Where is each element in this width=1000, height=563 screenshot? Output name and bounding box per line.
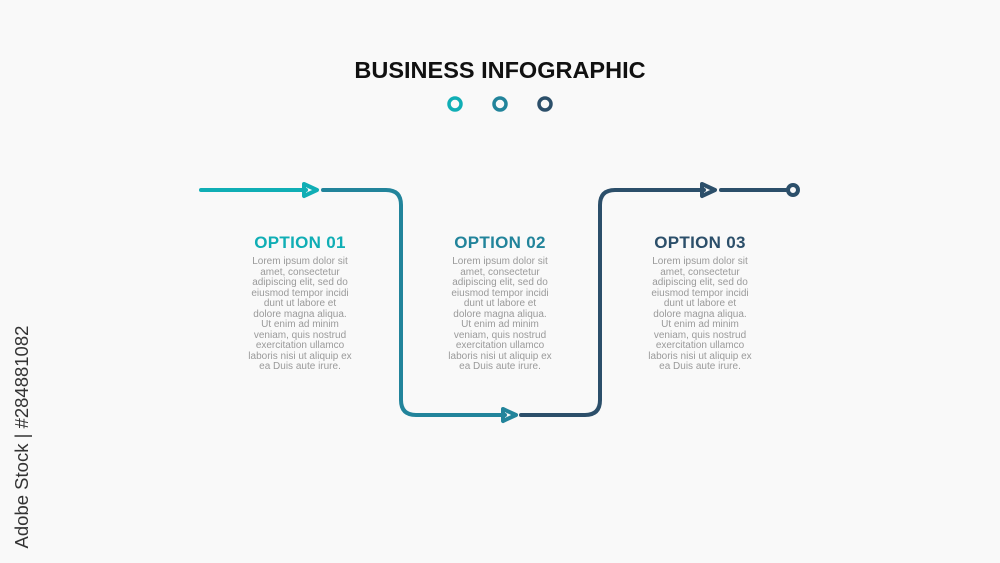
text: option 03: eiusmod tempor incidi <box>651 288 749 298</box>
text: option 03: adipiscing elit, sed do <box>652 277 748 288</box>
text: option 03: dolore magna aliqua. <box>653 308 747 320</box>
text: option 01: dunt ut labore et <box>264 298 336 309</box>
text: option 01: exercitation ullamco <box>256 340 344 351</box>
text: option 02: Lorem ipsum dolor sit <box>452 256 548 267</box>
text: option 03: veniam, quis nostrud <box>654 330 746 340</box>
text: option 03: Ut enim ad minim <box>661 319 739 330</box>
text: option 02: amet, consectetur <box>460 266 540 278</box>
text: option 01: Lorem ipsum dolor sit <box>252 256 348 267</box>
text: option 02: ea Duis aute irure. <box>459 361 541 372</box>
text: option 02: adipiscing elit, sed do <box>452 277 548 288</box>
text: option 01: Ut enim ad minim <box>261 319 339 330</box>
heading: option 01: OPTION 01 <box>254 233 346 252</box>
text: option 01: adipiscing elit, sed do <box>252 277 348 288</box>
text: option 01: ea Duis aute irure. <box>259 361 341 372</box>
text: option 01: amet, consectetur <box>260 266 340 278</box>
text: option 03: dunt ut labore et <box>664 298 736 309</box>
text: option 03: ea Duis aute irure. <box>659 361 741 372</box>
icon: title dots <box>449 98 551 110</box>
text: option 01: veniam, quis nostrud <box>254 330 346 340</box>
text: option 03 <box>648 256 752 372</box>
text: option 01: eiusmod tempor incidi <box>251 288 349 298</box>
text: option 03: exercitation ullamco <box>656 340 744 351</box>
text: option 02: veniam, quis nostrud <box>454 330 546 340</box>
text: option 02: laboris nisi ut aliquip ex <box>448 350 552 362</box>
text: option 03: laboris nisi ut aliquip ex <box>648 350 752 362</box>
text: option 02: Ut enim ad minim <box>461 319 539 330</box>
heading: option 02: OPTION 02 <box>454 233 546 252</box>
text: option 02: dunt ut labore et <box>464 298 536 309</box>
watermark id: Adobe Stock | #284881082 <box>11 326 32 548</box>
arrow: segment 3 <box>521 184 798 415</box>
text: option 02: dolore magna aliqua. <box>453 308 547 320</box>
text: option 01: dolore magna aliqua. <box>253 308 347 320</box>
text: option 01 <box>248 256 352 372</box>
heading: option 03: OPTION 03 <box>654 233 746 252</box>
text: option 02 <box>448 256 552 372</box>
title: BUSINESS INFOGRAPHIC <box>354 57 646 83</box>
arrow: segment 1 <box>201 184 317 196</box>
text: option 01: laboris nisi ut aliquip ex <box>248 350 352 362</box>
text: option 03: amet, consectetur <box>660 266 740 278</box>
text: option 02: exercitation ullamco <box>456 340 544 351</box>
arrow: segment 2 <box>323 190 516 421</box>
text: option 02: eiusmod tempor incidi <box>451 288 549 298</box>
text: option 03: Lorem ipsum dolor sit <box>652 256 748 267</box>
